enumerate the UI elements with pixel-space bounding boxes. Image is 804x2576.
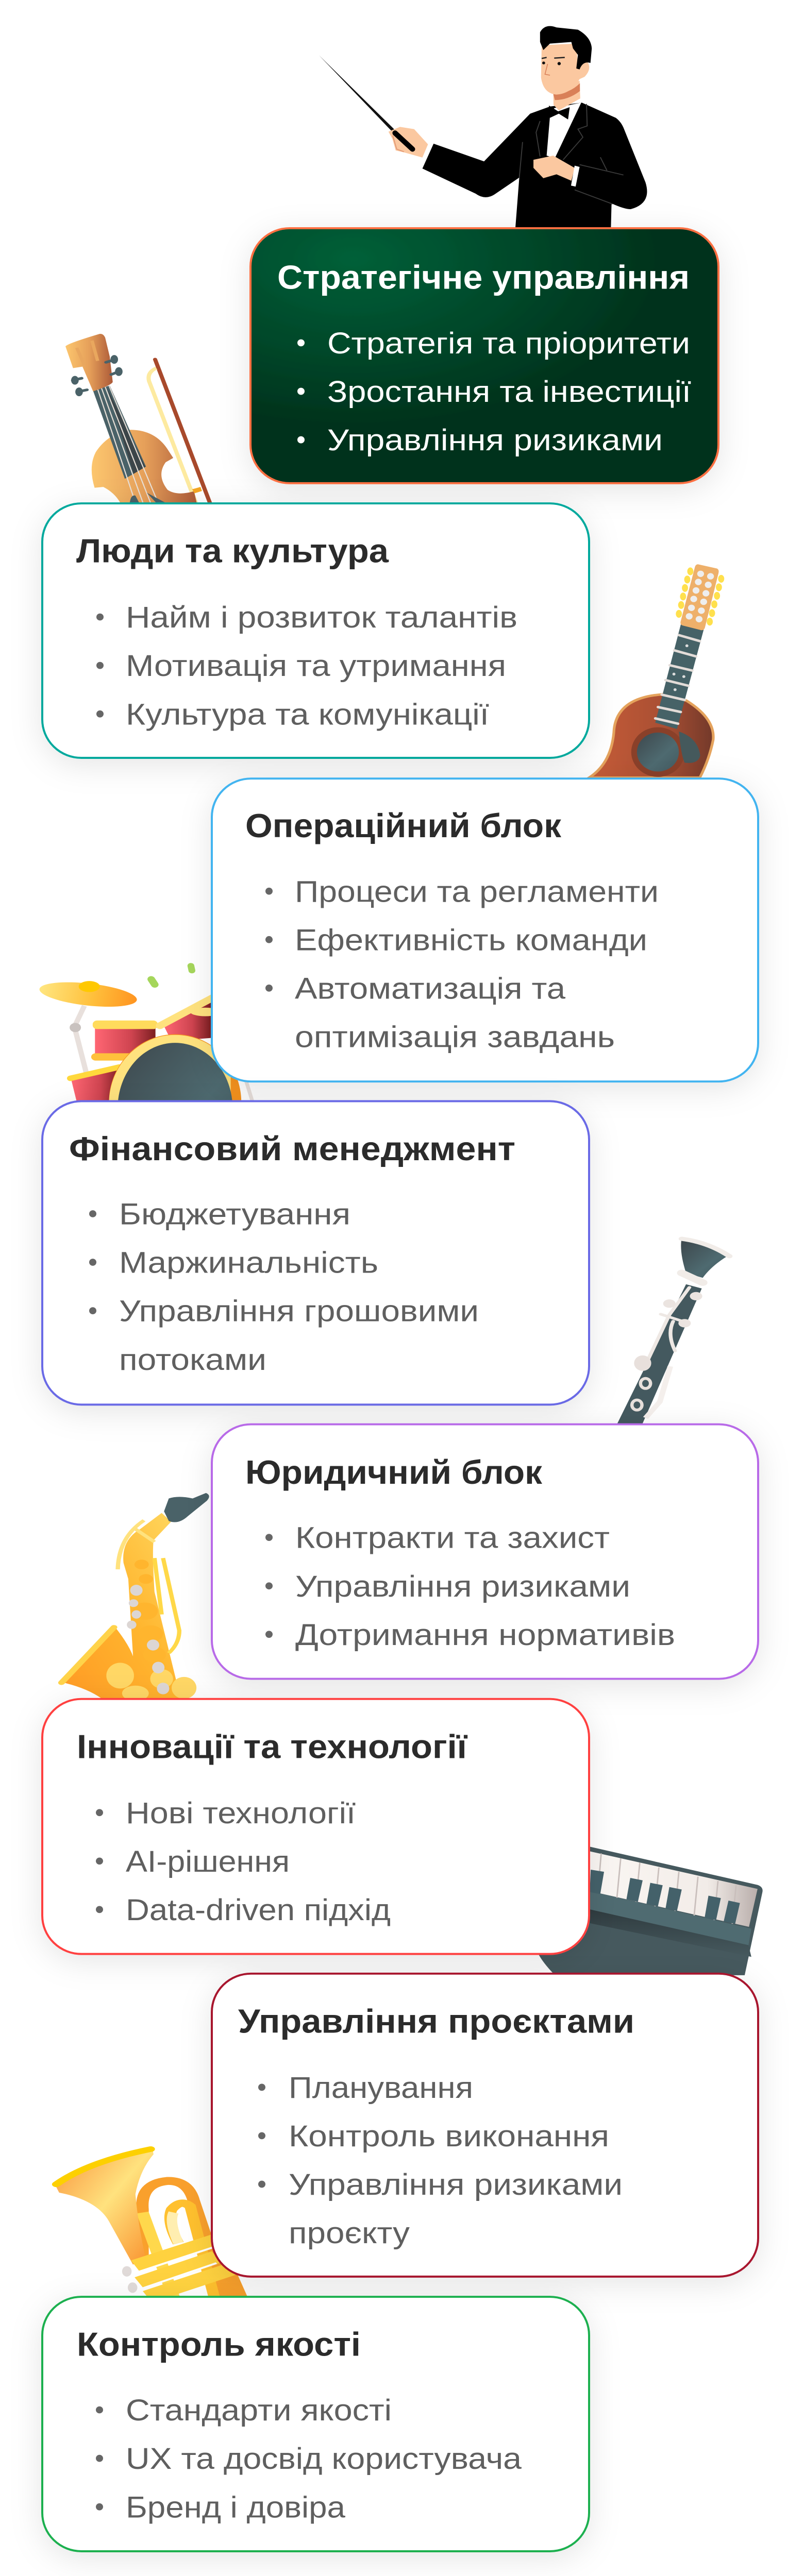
card background [250, 228, 718, 483]
illustration: drum kit [38, 962, 253, 1174]
list [265, 1520, 675, 1652]
list: Управління ризиками [289, 2167, 623, 2201]
panel: Юридичний блок [212, 1425, 758, 1679]
list: Бюджетування [119, 1197, 350, 1231]
card background [42, 1101, 589, 1404]
list: Культура та комунікації [126, 697, 489, 731]
heading: Юридичний блок [245, 1454, 542, 1491]
illustration: clarinet [617, 1239, 729, 1425]
list: Data-driven підхід [126, 1893, 391, 1927]
list [265, 874, 659, 1054]
panel: Фінансовий менеджмент [42, 1101, 589, 1404]
card background [42, 1699, 589, 1954]
list: Дотримання нормативів [295, 1617, 675, 1652]
card background [212, 1425, 758, 1679]
list [297, 326, 691, 457]
heading: Операційний блок [245, 807, 561, 844]
list: Автоматизація та [295, 971, 566, 1005]
list: Контракти та захист [295, 1520, 610, 1555]
list: оптимізація завдань [295, 1020, 615, 1054]
panel: Люди та культура [42, 503, 589, 758]
list: проєкту [289, 2216, 410, 2250]
list: Ефективність команди [295, 923, 647, 957]
card background [212, 1974, 758, 2277]
panel: Операційний блок [212, 778, 758, 1081]
list: Планування [289, 2070, 473, 2105]
list: Маржинальність [119, 1245, 378, 1279]
illustration: violin and bow [65, 334, 210, 503]
list: Управління ризиками [327, 423, 663, 457]
illustration: saxophone [61, 1493, 209, 1701]
card background [42, 2297, 589, 2551]
list: потоками [119, 1342, 266, 1377]
list [258, 2070, 623, 2250]
list: Процеси та регламенти [295, 874, 659, 908]
list: AI-рішення [126, 1844, 290, 1878]
list [89, 1197, 479, 1377]
heading: Управління проєктами [238, 2003, 634, 2040]
list: Стандарти якості [126, 2393, 392, 2427]
illustration: twelve-string guitar [589, 564, 724, 777]
list: Бренд і довіра [126, 2490, 346, 2524]
list: Контроль виконання [289, 2119, 609, 2153]
panel: Контроль якості [42, 2297, 589, 2551]
card background [42, 503, 589, 758]
list: Мотивація та утримання [126, 649, 506, 683]
list [96, 600, 517, 731]
list: Стратегія та пріоритети [327, 326, 690, 360]
heading: Фінансовий менеджмент [69, 1130, 515, 1167]
heading: Інновації та технології [77, 1728, 468, 1765]
list [96, 1795, 391, 1927]
list: Нові технології [126, 1795, 356, 1830]
panel: Інновації та технології [42, 1699, 589, 1954]
list: UX та досвід користувача [126, 2442, 522, 2476]
list: Управління грошовими [119, 1294, 479, 1328]
panel: Стратегічне управління [250, 228, 718, 483]
illustration: conductor with baton [319, 26, 647, 229]
list: Зростання та інвестиції [327, 375, 691, 409]
list: Найм і розвиток талантів [126, 600, 517, 634]
panel: Управління проєктами [212, 1974, 758, 2277]
list [96, 2393, 522, 2524]
heading: Стратегічне управління [277, 259, 690, 296]
illustration: keyboard [531, 1832, 763, 1975]
illustration: trumpet [55, 2147, 247, 2297]
heading: Люди та культура [76, 532, 389, 570]
list: Управління ризиками [295, 1569, 630, 1603]
heading: Контроль якості [77, 2326, 361, 2363]
card background [212, 778, 758, 1081]
